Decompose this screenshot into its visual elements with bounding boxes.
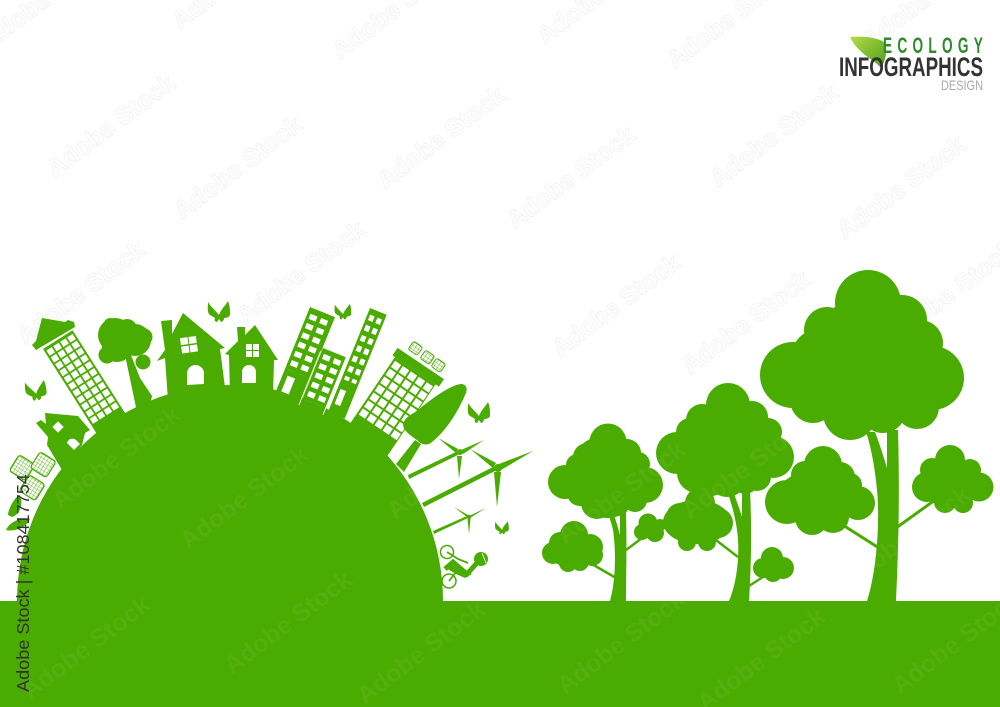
butterfly left [24, 380, 47, 401]
butterfly right [468, 402, 490, 423]
tree on planet [98, 318, 152, 415]
rooftop solar building [339, 341, 446, 465]
watermark on white background: Adobe Stock [705, 78, 844, 193]
small house on left slope [36, 413, 90, 470]
watermark on green [17, 400, 1000, 707]
watermark on green: Adobe Stock [552, 585, 691, 700]
butterfly over city [335, 304, 351, 320]
leaning grid tower [32, 318, 130, 439]
watermark on white background: Adobe Stock [547, 248, 686, 363]
wind turbine small upper [408, 438, 484, 479]
watermark on white background: Adobe Stock [372, 80, 511, 195]
planet hemisphere [17, 385, 443, 601]
house with chimney [157, 313, 226, 400]
logo leaf [850, 37, 886, 68]
watermark on green: Adobe Stock [219, 565, 358, 680]
second house [225, 325, 278, 395]
large tree [760, 270, 994, 601]
logo word ecology: ECOLOGY [883, 33, 983, 58]
watermark on white background: Adobe Stock [677, 265, 816, 380]
watermark on green: Adobe Stock [352, 595, 491, 707]
watermark on green: Adobe Stock [47, 400, 186, 515]
ground band [0, 601, 1000, 707]
watermark on white background: Adobe Stock [832, 130, 971, 245]
watermark on green: Adobe Stock [382, 410, 521, 525]
watermark on white background: Adobe Stock [12, 235, 151, 350]
medium tree [634, 383, 794, 601]
logo word design: DESIGN [941, 77, 983, 93]
watermark on green: Adobe Stock [837, 480, 976, 595]
solar panels on left slope [9, 452, 56, 501]
small tree [542, 424, 663, 601]
city tower B [299, 348, 346, 415]
watermark on green: Adobe Stock [552, 435, 691, 550]
stock id vertical text: Adobe Stock | #108417754 [13, 474, 33, 692]
watermark on white background: Adobe Stock [42, 68, 181, 183]
cyclist [440, 546, 488, 588]
watermark on white background: Adobe Stock [502, 120, 641, 235]
logo [839, 33, 983, 93]
city tower C [328, 308, 387, 419]
leaves on left slope [6, 495, 30, 530]
butterfly top left [208, 301, 230, 322]
watermark on green: Adobe Stock [17, 590, 156, 705]
watermark on white background: Adobe Stock [169, 110, 308, 225]
watermark on white background: Adobe Stock [232, 215, 371, 330]
watermark on white background [0, 0, 1000, 380]
city tower A [275, 307, 335, 404]
watermark on green: Adobe Stock [677, 410, 816, 525]
wind turbine large [422, 449, 533, 507]
conical tree [396, 384, 467, 472]
butterfly lower right [495, 521, 509, 534]
watermark on green: Adobe Stock [175, 440, 314, 555]
wind turbine small lower [433, 507, 486, 534]
